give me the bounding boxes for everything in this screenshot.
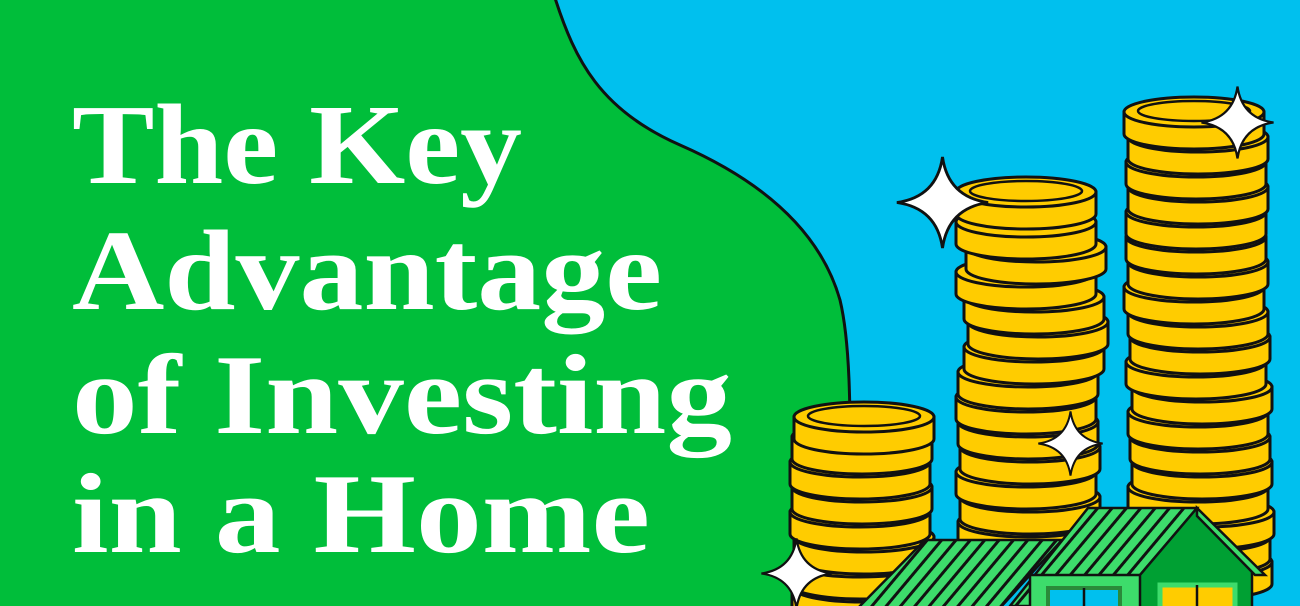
house [858, 508, 1265, 606]
coin stack 3 (tallest, right) [1124, 97, 1274, 599]
sparkle icons [761, 86, 1274, 606]
title [72, 81, 732, 577]
background: blue region with curve [555, 0, 1300, 606]
title: The Key [72, 81, 522, 208]
title: Advantage [72, 207, 662, 334]
title: in a Home [72, 450, 650, 577]
coin stack 1 (short, left) [790, 402, 934, 606]
coin stack 2 (middle) [956, 177, 1108, 559]
title: of Investing [72, 331, 732, 458]
